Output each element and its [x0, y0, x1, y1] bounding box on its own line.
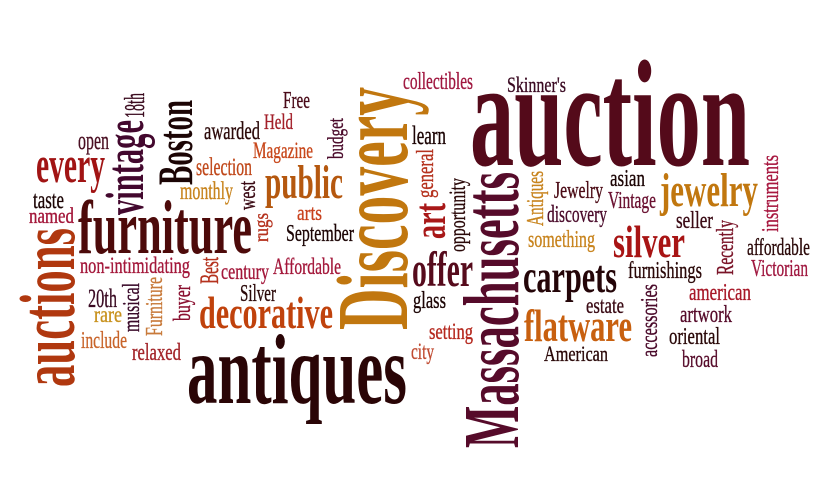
word: Skinner's: Skinner's: [507, 72, 566, 97]
word: Affordable: Affordable: [273, 254, 341, 279]
word: american: american: [689, 280, 751, 306]
word: rugs: rugs: [251, 213, 273, 242]
word: broad: broad: [682, 347, 718, 373]
word: auctions: auctions: [4, 228, 91, 387]
word: every: every: [36, 137, 105, 194]
word: arts: arts: [297, 200, 322, 225]
word: artwork: artwork: [680, 302, 732, 328]
word: monthly: monthly: [180, 178, 233, 205]
word: carpets: carpets: [523, 251, 617, 303]
word: offer: offer: [412, 241, 473, 297]
word: American: American: [544, 341, 608, 366]
word: relaxed: relaxed: [132, 340, 181, 366]
word: seller: seller: [676, 208, 713, 234]
word: 18th: 18th: [120, 93, 151, 118]
word: general: general: [413, 149, 439, 198]
word: antiques: antiques: [187, 314, 407, 425]
word: vintage: vintage: [95, 120, 155, 215]
word: Boston: Boston: [147, 100, 203, 185]
word: city: city: [411, 339, 434, 364]
word: glass: glass: [413, 288, 446, 314]
word: Magazine: Magazine: [253, 138, 313, 163]
word: discovery: discovery: [547, 202, 607, 228]
word: budget: budget: [323, 118, 348, 159]
word: Silver: Silver: [240, 281, 276, 307]
word: flatware: flatware: [524, 300, 632, 351]
word: taste: taste: [33, 187, 64, 214]
word: instruments: instruments: [758, 155, 784, 232]
word: decorative: decorative: [199, 287, 333, 338]
word: Vintage: Vintage: [608, 188, 656, 214]
word: September: September: [286, 221, 354, 247]
word: Free: Free: [283, 88, 310, 114]
word: collectibles: collectibles: [403, 69, 473, 95]
word: selection: selection: [196, 154, 252, 181]
word: named: named: [29, 203, 74, 228]
word: estate: estate: [586, 293, 624, 318]
word: something: something: [528, 227, 595, 253]
word: opportunity: opportunity: [445, 178, 470, 252]
word: art: art: [404, 203, 455, 239]
word: musical: musical: [119, 283, 145, 332]
word: non-intimidating: non-intimidating: [80, 253, 190, 278]
word: buyer: buyer: [170, 285, 196, 321]
word: Antiques: Antiques: [523, 171, 549, 226]
word: Held: Held: [264, 109, 293, 134]
word: furnishings: furnishings: [628, 258, 702, 284]
word: Jewelry: Jewelry: [554, 178, 603, 204]
word: Furniture: Furniture: [142, 277, 168, 336]
word: rare: rare: [94, 302, 122, 327]
word: jewelry: jewelry: [659, 164, 758, 217]
word: accessories: accessories: [637, 284, 663, 357]
word: west: west: [235, 181, 261, 210]
word: asian: asian: [610, 166, 645, 192]
word: include: include: [81, 328, 127, 354]
word: silver: silver: [613, 216, 685, 267]
word: 20th: 20th: [88, 284, 117, 313]
word: awarded: awarded: [204, 118, 260, 145]
word: setting: setting: [429, 319, 473, 344]
word: oriental: oriental: [669, 324, 720, 350]
word: Recently: Recently: [713, 220, 739, 275]
word: learn: learn: [412, 121, 446, 150]
word: public: public: [265, 156, 343, 209]
word: furniture: furniture: [78, 186, 252, 270]
word: century: century: [221, 259, 269, 284]
word: open: open: [78, 126, 109, 155]
word: Best: Best: [195, 257, 224, 284]
